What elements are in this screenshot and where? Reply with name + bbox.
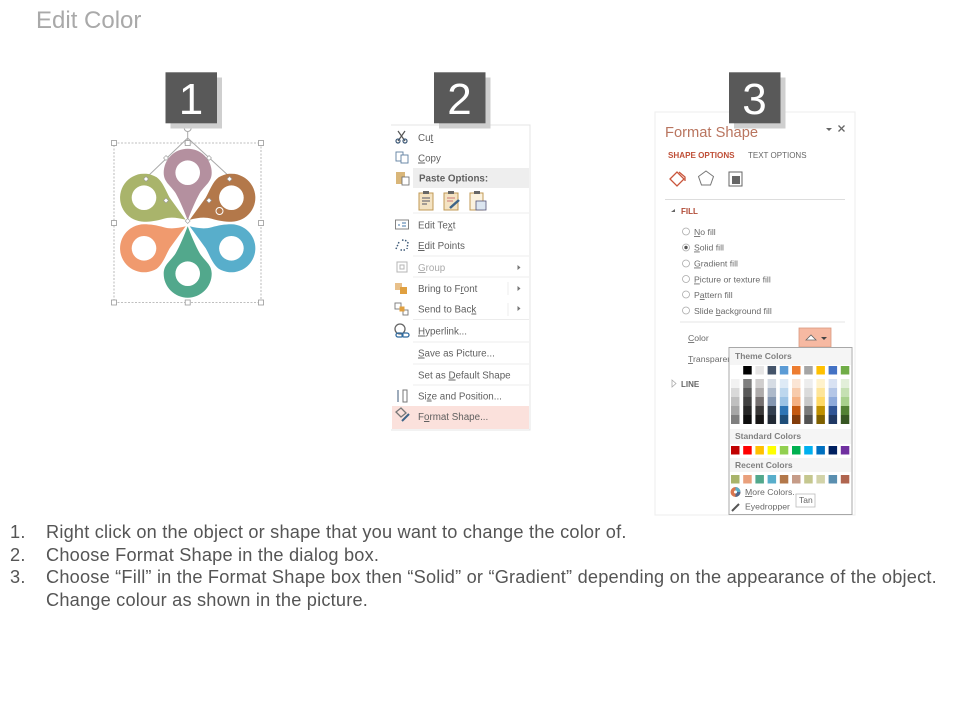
pane divider xyxy=(665,198,845,200)
number badge 2: 2 xyxy=(447,75,472,124)
pin: teal bottom xyxy=(164,226,212,298)
number badge 1 xyxy=(166,72,222,128)
fill heading xyxy=(671,207,698,216)
number badge 3 xyxy=(729,72,786,128)
icon: copy xyxy=(396,152,408,163)
tooltip xyxy=(796,494,815,507)
icon: hyperlink xyxy=(395,324,409,337)
menu labels: Size and Position... xyxy=(418,392,502,402)
instructions list xyxy=(10,522,937,610)
fill options: Solid fill xyxy=(694,242,724,252)
icon: size and position xyxy=(398,390,407,402)
menu labels: Save as Picture... xyxy=(418,348,495,360)
menu labels: Set as Default Shape xyxy=(418,370,511,382)
popup headings: Standard Colors xyxy=(735,431,801,441)
menu labels: Edit Text xyxy=(418,220,456,232)
icon: format shape xyxy=(396,408,409,421)
color popup xyxy=(729,348,852,514)
icon: eyedropper xyxy=(732,504,739,511)
number badge 2 xyxy=(434,72,490,128)
fill options xyxy=(682,227,772,316)
instructions list: Change colour as shown in the picture. xyxy=(46,590,368,610)
color row xyxy=(688,328,831,347)
selection handles xyxy=(112,124,264,305)
menu labels: Paste Options: xyxy=(419,174,488,184)
instructions list: 2. xyxy=(10,545,26,565)
pane tabs: SHAPE OPTIONS xyxy=(668,151,735,160)
line heading: LINE xyxy=(681,380,700,389)
pane tabs: TEXT OPTIONS xyxy=(748,151,807,160)
menu labels: Edit Points xyxy=(418,241,465,252)
menu labels: Format Shape... xyxy=(418,412,488,423)
line heading xyxy=(672,380,700,389)
number badge 3: 3 xyxy=(742,75,767,124)
menu labels: Copy xyxy=(418,154,441,164)
instructions list: Choose “Fill” in the Format Shape box then “Solid” or “Gradient” depending on the appearance of the object. xyxy=(46,567,937,587)
fill options: Picture or texture fill xyxy=(694,274,771,284)
pin: blue lower right xyxy=(190,224,255,272)
icon: group xyxy=(397,262,407,272)
number badge 1: 1 xyxy=(179,75,203,124)
pane title: Format Shape xyxy=(665,125,758,141)
pin: mauve top xyxy=(164,149,212,220)
panel: step 2 context menu xyxy=(391,125,530,430)
standard color swatches xyxy=(731,446,849,454)
more colors link: More Colors... xyxy=(745,487,800,497)
icons: paste options xyxy=(419,191,486,210)
icon: edit text xyxy=(396,220,408,229)
icon: bring to front xyxy=(395,283,407,294)
menu labels: Cut xyxy=(418,133,434,144)
pane close controls xyxy=(826,126,844,132)
recent color swatches xyxy=(731,475,849,484)
fill options: Slide background fill xyxy=(694,306,772,316)
instructions list: 1. xyxy=(10,522,26,542)
fill options: Gradient fill xyxy=(694,258,738,268)
theme shade swatches xyxy=(731,379,849,424)
icon: send to back xyxy=(395,303,408,315)
icon: scissors xyxy=(396,131,407,143)
popup headings: Theme Colors xyxy=(735,351,792,361)
fill options: No fill xyxy=(694,227,716,237)
transparency label: Transparency xyxy=(688,354,741,364)
instructions list: 3. xyxy=(10,567,26,587)
icon: edit points xyxy=(396,240,408,250)
pin: olive upper left xyxy=(120,174,186,222)
selection frame xyxy=(114,131,261,302)
icons: fill, effects, size xyxy=(670,171,742,186)
instructions list: Choose Format Shape in the dialog box. xyxy=(46,545,379,565)
eyedropper link: Eyedropper xyxy=(745,502,790,512)
fill heading: FILL xyxy=(681,207,698,216)
menu labels: Send to Back xyxy=(418,304,476,316)
menu labels: Group xyxy=(418,263,446,274)
popup headings: Recent Colors xyxy=(735,460,793,470)
fill options: Pattern fill xyxy=(694,290,733,300)
icon: paste xyxy=(396,172,409,185)
theme color swatches xyxy=(731,366,849,374)
pin: brown upper right xyxy=(190,174,255,222)
panel: step 1 flower shape xyxy=(112,124,264,305)
icon: color wheel xyxy=(730,487,740,497)
tooltip: Tan xyxy=(799,495,813,505)
menu labels: Bring to Front xyxy=(418,284,478,295)
menu submenu arrows xyxy=(518,265,520,311)
popup headings xyxy=(735,351,801,470)
color row: Color xyxy=(688,333,709,343)
pane tabs xyxy=(668,151,807,160)
pin: orange lower left xyxy=(120,224,186,272)
panel: step 3 format shape pane xyxy=(655,112,855,515)
instructions list: Right click on the object or shape that you want to change the color of. xyxy=(46,522,627,542)
title: Edit Color xyxy=(36,7,141,34)
menu labels: Hyperlink... xyxy=(418,326,467,338)
menu labels xyxy=(418,133,511,423)
